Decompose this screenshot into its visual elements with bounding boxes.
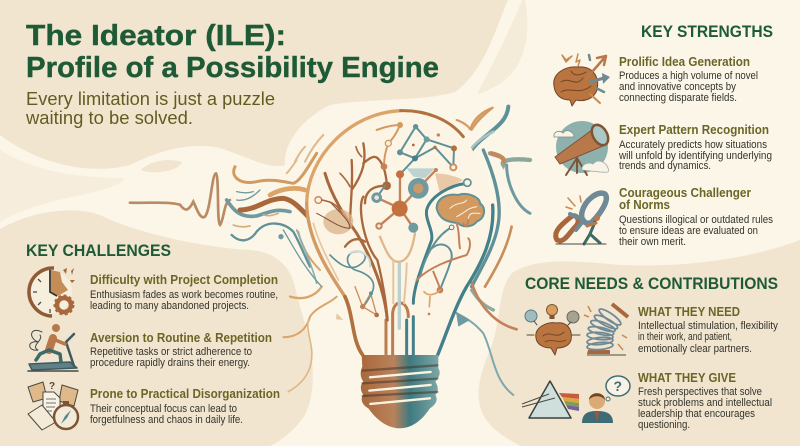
text: prolific idea generation: connecting disparate fields. — [619, 92, 737, 104]
text: what they need: WHAT THEY NEED — [638, 304, 740, 319]
teal loops left — [330, 251, 379, 317]
illustration: flowing energy lines left of bulb — [130, 153, 320, 270]
text: prolific idea generation: and innovative concepts by — [619, 81, 736, 93]
illustration: light bulb — [307, 111, 493, 428]
text: what they need — [638, 304, 778, 355]
icon: broken clock with gear — [28, 268, 75, 316]
icon: brain with arrows — [554, 54, 610, 106]
illustration: flowing lines right and below bulb — [283, 107, 530, 395]
icon: scattered papers and compass — [28, 381, 78, 430]
text: routine aversion — [90, 330, 272, 369]
text: courageous challenger: Questions illogical or outdated rules — [619, 214, 773, 226]
text: expert pattern recognition: trends and dynamics. — [619, 160, 711, 172]
panel: core needs and contributions — [522, 275, 778, 431]
text: prolific idea generation: Produces a high volume of novel — [619, 70, 758, 82]
bulb outline — [307, 111, 493, 355]
title: The Ideator (ILE): — [26, 20, 286, 52]
title — [26, 20, 439, 84]
icon: thinking person — [582, 376, 630, 423]
heading: key challenges: KEY CHALLENGES — [26, 242, 171, 260]
bulb glass — [307, 111, 493, 355]
small brain right — [437, 194, 484, 226]
text: expert pattern recognition: will unfold by identifying underlying — [618, 150, 772, 162]
text: courageous challenger: of Norms — [619, 197, 670, 212]
text: courageous challenger: to ensure ideas are evaluated on — [619, 225, 758, 237]
text: prolific idea generation: Prolific Idea Generation — [619, 54, 750, 69]
text: what they need: Intellectual stimulation, flexibility — [638, 320, 778, 332]
text: what they give: questioning. — [638, 419, 690, 431]
icon: prism — [522, 381, 579, 418]
text: what they give — [638, 370, 772, 431]
text: what they give: stuck problems and intellectual — [638, 397, 772, 409]
text: expert pattern recognition: Accurately predicts how situations — [619, 139, 767, 151]
icon: telescope under sky — [554, 121, 612, 175]
brain left smudge — [315, 197, 353, 234]
text: expert pattern recognition — [618, 122, 772, 172]
heading: key strengths: KEY STRENGTHS — [641, 23, 773, 41]
text: courageous challenger: Courageous Challenger — [619, 185, 751, 200]
text: what they give: Fresh perspectives that solve — [638, 386, 762, 398]
teal and orange branches right — [413, 179, 471, 315]
subtitle: waiting to be solved. — [25, 108, 193, 128]
title: Profile of a Possibility Engine — [26, 52, 439, 84]
icon: brain with ideas — [525, 304, 580, 355]
text: prolific idea generation — [619, 54, 758, 104]
text: project completion: leading to many abandoned projects. — [90, 300, 249, 312]
bulb screw base — [361, 355, 440, 428]
text: disorganization: Their conceptual focus can lead to — [90, 403, 237, 415]
text: expert pattern recognition: Expert Pattern Recognition — [619, 122, 769, 137]
text: what they give: leadership that encourages — [638, 408, 755, 420]
icon: thinking person: ? — [614, 378, 622, 394]
icon: person on treadmill — [28, 324, 78, 371]
panel: key strengths — [554, 23, 773, 248]
neural tree branches — [325, 122, 403, 320]
text: project completion — [90, 272, 278, 312]
text: courageous challenger: their own merit. — [619, 236, 686, 248]
icon: scattered papers and compass: ? — [49, 381, 55, 392]
text: routine aversion: procedure rapidly drains their energy. — [90, 357, 250, 369]
filament — [380, 233, 415, 355]
icon: compressed spring — [584, 304, 628, 355]
text: disorganization: forgetfulness and chaos in daily life. — [90, 414, 243, 426]
subtitle: Every limitation is just a puzzle — [26, 89, 275, 109]
panel: key challenges — [26, 242, 280, 430]
text: routine aversion: Aversion to Routine & Repetition — [90, 330, 272, 345]
text: project completion: Difficulty with Project Completion — [90, 272, 278, 287]
network nodes — [371, 124, 463, 233]
text: project completion: Enthusiasm fades as work becomes routine, — [90, 289, 278, 301]
text: disorganization — [90, 386, 280, 426]
text: what they give: WHAT THEY GIVE — [638, 370, 736, 385]
text: courageous challenger — [619, 185, 773, 248]
text: what they need: emotionally clear partners. — [638, 343, 752, 355]
subtitle — [25, 89, 275, 128]
heading: core needs: CORE NEEDS & CONTRIBUTIONS — [525, 275, 778, 293]
icon: figure breaking chain — [556, 193, 606, 244]
text: what they need: in their work, and patient, — [638, 331, 732, 343]
text: routine aversion: Repetitive tasks or strict adherence to — [90, 346, 252, 358]
text: disorganization: Prone to Practical Disorganization — [90, 386, 280, 401]
